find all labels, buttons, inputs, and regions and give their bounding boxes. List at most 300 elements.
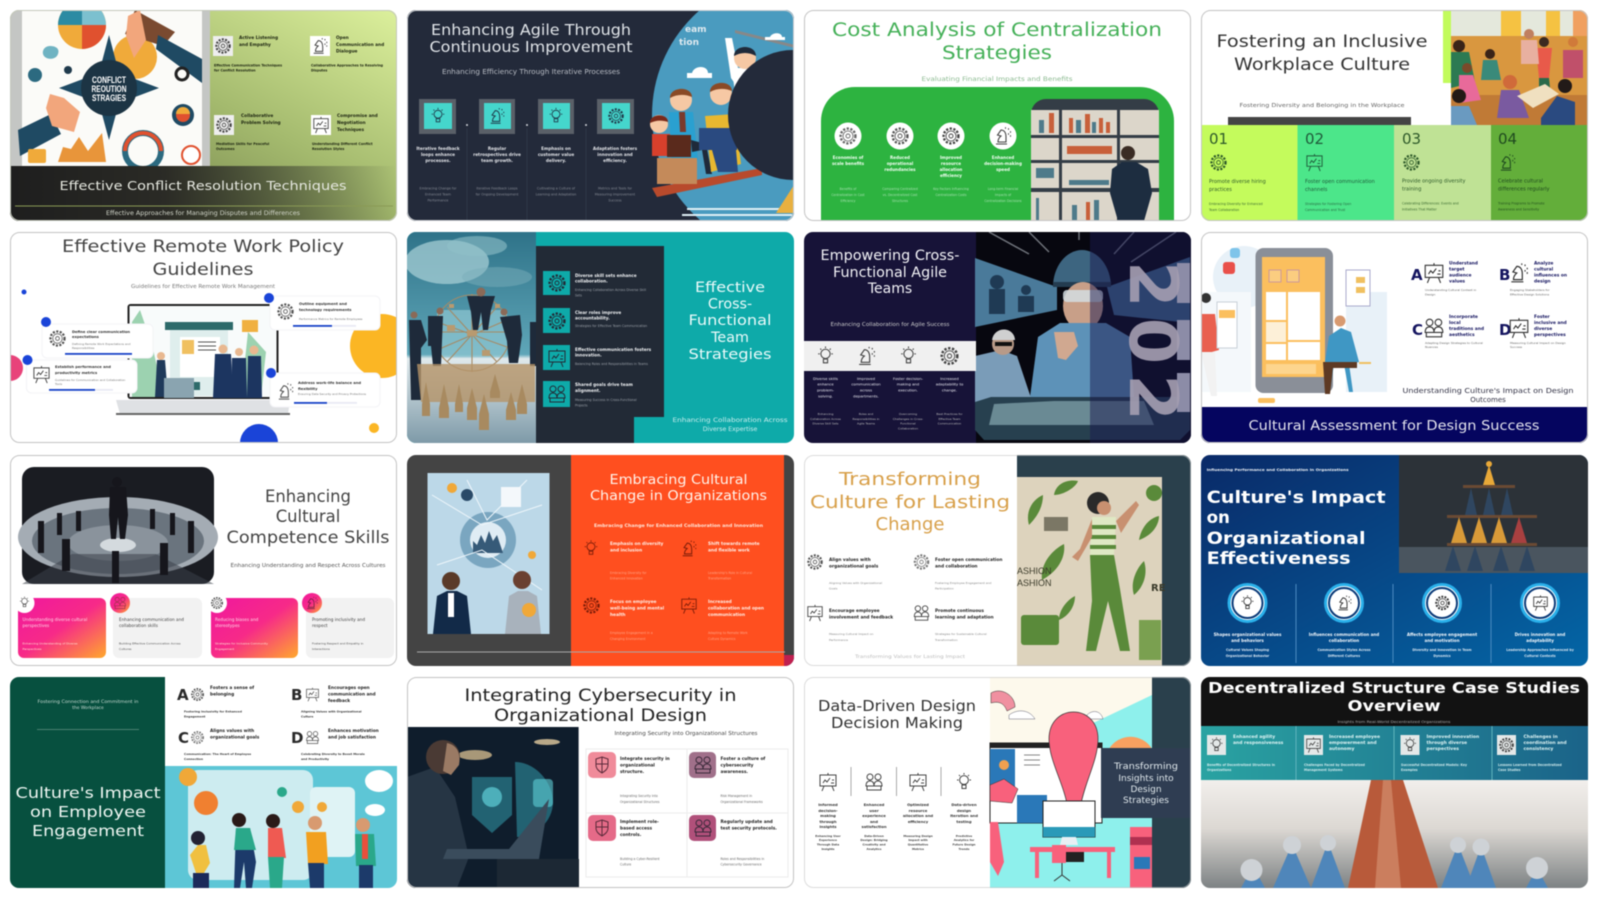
green panel: Centralization in Cost <box>831 193 865 197</box>
policy card: outline equipment: technology requirements <box>299 308 352 312</box>
title: Guidelines <box>152 260 254 280</box>
panel: strategies list: Enhancing Collaboration Across Diverse Skill <box>575 288 646 292</box>
slide: Cost Analysis of Centralization Strategies <box>804 10 1191 221</box>
card 3: Engagement <box>215 647 235 651</box>
items A to D: values <box>1449 278 1465 284</box>
four ring columns: Communication Styles Across <box>1317 648 1371 652</box>
items: Encourage employee <box>829 608 880 614</box>
green panel: Enhanced <box>992 155 1014 160</box>
item descriptions: Increased <box>940 376 959 381</box>
illustration: sustainable fashion: ASHION <box>1017 578 1052 588</box>
subtitle: Integrating Security into Organizational Structures <box>614 731 758 737</box>
column 02: channels <box>1305 187 1328 193</box>
items: Participation <box>935 586 954 590</box>
column 02 <box>1298 125 1394 221</box>
item descriptions: Roles and <box>859 412 873 416</box>
teal column band: Successful Decentralized Models: Key <box>1401 763 1467 767</box>
subtitle: Understanding Culture's Impact on Design <box>1402 387 1574 395</box>
teal column band: perspectives <box>1426 746 1459 752</box>
title: Effectiveness <box>1207 548 1351 568</box>
items grid: Dialogue <box>336 48 357 54</box>
card 2 <box>110 593 202 658</box>
title: Transforming <box>838 469 981 490</box>
illustration: phone app with people <box>1201 246 1387 403</box>
item descriptions: Enhancing <box>818 412 833 416</box>
green panel: Improved <box>940 155 962 160</box>
change items: and flexible work <box>708 548 750 554</box>
title <box>430 21 633 56</box>
photo: futuristic control room: 202 <box>1114 261 1192 431</box>
title: Cultural <box>276 507 340 526</box>
four icon columns: Metrics and Tools for <box>598 186 633 190</box>
green panel: Long-term Financial <box>988 187 1018 191</box>
green panel: Efficiency <box>841 199 856 203</box>
four icon columns: Emphasis on <box>541 146 571 151</box>
change items: Culture Dynamics <box>708 637 736 641</box>
item descriptions: Foster decision- <box>893 376 924 381</box>
security grid: Foster a culture of <box>720 756 765 762</box>
teal column band <box>1201 726 1588 780</box>
four columns: Analytics for <box>954 838 975 842</box>
column 01: Team Collaboration <box>1208 208 1239 212</box>
photo: inclusive classroom illustration <box>1451 10 1588 125</box>
left panel <box>10 677 165 888</box>
items A to D: Understand <box>1449 260 1478 266</box>
subtitle: Guidelines for Effective Remote Work Management <box>131 284 275 290</box>
items A to D: Culture <box>301 714 313 718</box>
security grid: Risk Management in <box>720 794 752 798</box>
change items: Adapting to Remote Work <box>708 631 748 635</box>
item descriptions: communication <box>851 382 881 386</box>
column 03: Provide ongoing diversity <box>1402 178 1466 184</box>
title: on <box>1207 507 1230 527</box>
change items: Enhanced Innovation <box>610 576 643 580</box>
change items: Focus on employee <box>610 599 656 605</box>
four columns: experience <box>862 813 886 818</box>
items A to D: B <box>1499 266 1510 284</box>
four icon columns: Adaptation fosters <box>593 146 638 151</box>
image text: compass label <box>92 75 127 104</box>
items A to D: Adapting Design Strategies to Cultural <box>1425 341 1483 345</box>
teal column band: Examples <box>1401 768 1418 772</box>
slide: Fostering an Inclusive Workplace Culture <box>1201 10 1588 221</box>
items A to D: belonging <box>210 692 234 698</box>
items A to D: Analyze <box>1534 260 1553 266</box>
teal column band: Improved innovation <box>1426 734 1479 740</box>
photo: network and chess pieces <box>405 232 536 443</box>
items A to D: target <box>1449 266 1464 272</box>
teal column band: and responsiveness <box>1233 740 1284 746</box>
four columns: Future Design <box>953 842 975 846</box>
slide: Enhancing Cultural Competence Skills <box>10 455 397 666</box>
items: Align values with <box>829 557 871 563</box>
policy card: define communication: Define clear communication <box>72 330 130 334</box>
title: Change <box>876 514 944 535</box>
items: learning and adaptation <box>935 614 994 620</box>
panel: strategies list <box>536 246 664 443</box>
four ring columns: Leadership Approaches Influenced by <box>1506 648 1575 652</box>
four ring columns: Organizational Behavior <box>1226 654 1270 658</box>
security grid: awareness. <box>720 769 748 775</box>
item descriptions: Challenges in Cross- <box>893 417 923 421</box>
security grid: Integrate security in <box>620 756 670 762</box>
items grid: Effective Communication Techniques <box>214 64 282 68</box>
panel: strategies list: Clear roles improve <box>575 310 621 315</box>
item descriptions: Functional <box>900 422 916 426</box>
items grid: and Empathy <box>239 42 271 48</box>
four ring columns: Shapes organizational values <box>1214 632 1282 637</box>
four columns: Measuring Design <box>903 834 933 838</box>
item descriptions: Best Practices for <box>936 412 963 416</box>
column 02: Communication and Trust <box>1305 208 1346 212</box>
card 3: Strategies for Inclusive Community <box>215 642 268 646</box>
photo: futuristic control room <box>975 232 1192 443</box>
title: Continuous Improvement <box>430 38 633 56</box>
column 03 <box>1394 125 1491 221</box>
items A to D: Enhances motivation <box>328 728 379 734</box>
four columns: Enhancing User <box>815 834 841 838</box>
bottom banner with title <box>1201 407 1588 443</box>
change items: well-being and mental <box>610 606 665 612</box>
subtitle: Enhancing Collaboration for Agile Success <box>830 322 950 328</box>
footer subtitle: Transforming Values for Lasting Impact <box>854 654 965 660</box>
items: Fostering Employee Engagement and <box>935 581 992 585</box>
card 4: respect <box>312 623 328 628</box>
four columns: Impact with <box>908 838 928 842</box>
item descriptions: enhance <box>817 382 834 386</box>
four ring columns: Different Cultures <box>1328 654 1360 658</box>
photo: pawn pyramid <box>1399 455 1588 573</box>
items: Measuring Cultural Impact on <box>829 632 873 636</box>
slide: Empowering Cross-Functional Agile Teams <box>804 232 1192 443</box>
items A to D: Aligns values with <box>210 728 254 734</box>
panel: strategies list: Sets <box>575 294 582 298</box>
panel: strategies list: Strategies for Effective Team Communication <box>575 324 647 328</box>
title: Fostering an Inclusive <box>1216 32 1428 51</box>
item descriptions: Diverse Skill Sets <box>813 422 839 426</box>
title <box>1208 679 1580 715</box>
items A to D: Design <box>1425 292 1435 296</box>
items: Foster open communication <box>935 557 1002 563</box>
green panel: vs. Decentralized Cost <box>883 193 918 197</box>
title <box>688 280 772 363</box>
image text: compass label: REOUTION <box>92 84 127 95</box>
four columns: Quantitative <box>908 842 928 846</box>
four columns: Analytics <box>867 847 882 851</box>
change items: Increased <box>708 599 732 605</box>
title: on Employee <box>30 803 146 821</box>
title <box>63 238 344 276</box>
four icon columns: efficiency. <box>603 158 627 163</box>
security grid <box>586 749 788 877</box>
items: Goals <box>829 586 838 590</box>
items grid: Understanding Different Conflict <box>312 142 373 146</box>
item descriptions: Overcoming <box>899 412 917 416</box>
slide: Integrating Cybersecurity in Organizational Design <box>407 677 794 888</box>
item descriptions <box>810 376 964 430</box>
slide: Enhancing Agile Through Continuous Improvement <box>406 10 795 222</box>
policy card: establish metrics: Establish performance and <box>55 365 111 369</box>
items A to D: feedback <box>328 698 350 704</box>
four icon columns: Learning and Adaptation <box>536 192 576 196</box>
four icon columns: for Ongoing Development <box>476 192 519 196</box>
subtitle: Enhancing Efficiency Through Iterative Processes <box>442 68 621 76</box>
items A to D: A <box>177 686 189 704</box>
card 4 <box>302 593 394 658</box>
items: Promote continuous <box>935 608 984 614</box>
item descriptions: making and <box>897 382 920 386</box>
items A to D: Communication: The Heart of Employee <box>184 752 251 756</box>
four ring columns: Diversity and Innovation in Team <box>1412 648 1472 652</box>
change items: Leadership's Role in Cultural <box>708 571 752 575</box>
items A to D: influences on <box>1534 272 1567 278</box>
illustration: sustainable fashion <box>1017 477 1166 666</box>
panel: strategies list: Projects <box>575 404 588 408</box>
green panel: Benefits of <box>840 187 857 191</box>
subtitle: Outcomes <box>1470 396 1506 404</box>
four icon columns <box>416 98 638 202</box>
items grid: Open <box>336 35 349 41</box>
teal column band: Enhanced agility <box>1233 734 1275 740</box>
item descriptions: change. <box>942 388 957 392</box>
illustration: team on a boat <box>649 10 794 221</box>
column 01 <box>1201 125 1298 221</box>
items A to D: Connection <box>184 757 203 761</box>
card 3: stereotypes <box>215 623 240 628</box>
column 03: Celebrating Differences: Events and <box>1402 202 1459 206</box>
title: Competence Skills <box>226 528 390 547</box>
title: Decision Making <box>831 714 963 732</box>
item descriptions: Communication <box>938 422 961 426</box>
column 01: Promote diverse hiring <box>1209 179 1266 185</box>
policy card: outline equipment: Outline equipment and <box>299 302 347 306</box>
title: Culture's Impact <box>16 784 160 802</box>
items: Transformation <box>934 638 958 642</box>
change items <box>584 540 764 641</box>
four icon columns: Iterative feedback <box>416 146 460 151</box>
eyebrow: Influencing Performance and Collaboration in Organizations <box>1207 468 1349 472</box>
items A to D: diverse <box>1534 326 1552 332</box>
items A to D: Success <box>1510 345 1523 349</box>
four icon columns: Measuring Improvement <box>595 192 636 196</box>
items A to D: Foster <box>1534 314 1551 320</box>
items grid: Resolution Styles <box>312 147 344 151</box>
four columns: Through Data <box>817 842 839 846</box>
green panel: Centralization Costs <box>935 193 967 197</box>
title: Organizational Design <box>494 705 707 725</box>
security grid: Roles and Responsibilities in <box>720 857 764 861</box>
items: involvement and feedback <box>829 614 893 620</box>
card 1 <box>14 593 106 658</box>
item descriptions: adaptability to <box>936 382 964 386</box>
card 2: collaboration skills <box>119 623 158 628</box>
green panel: Centralization Decisions <box>984 199 1022 203</box>
card 1: Perspectives <box>22 647 42 651</box>
items A to D: Encourages open <box>328 685 370 691</box>
title: Culture for Lasting <box>810 492 1010 513</box>
column 04: Celebrate cultural <box>1498 178 1543 184</box>
photo: analyst looking at chart wall <box>1031 99 1159 221</box>
policy card: work-life balance: Address work-life balance and <box>298 381 361 385</box>
four icon columns: Success <box>608 198 622 202</box>
four columns: through <box>819 819 837 824</box>
subtitle: Enhancing Collaboration Across <box>672 417 788 424</box>
four columns: Insights <box>821 847 835 851</box>
column 01: 01 <box>1209 130 1228 148</box>
green panel: operational <box>887 161 914 166</box>
title: Empowering Cross- <box>820 248 960 264</box>
photo: analyst with laptop and holograms <box>407 727 579 888</box>
card 1: Enhancing Understanding of Diverse <box>22 642 78 646</box>
items A to D: audience <box>1449 272 1471 278</box>
photo: leader on disc <box>18 467 218 584</box>
items A to D: Effective Design Solutions <box>1510 292 1550 296</box>
callout box: Design <box>1130 785 1162 795</box>
subtitle: Diverse Expertise <box>703 426 757 433</box>
items grid: Mediation Skills for Peaceful <box>216 142 269 146</box>
four icon columns: customer value <box>538 152 574 157</box>
four columns: Informed <box>818 802 838 807</box>
four columns: Design: Bridging <box>860 838 888 842</box>
slide: Effective Conflict Resolution Techniques <box>10 1 397 221</box>
title: Engagement <box>32 822 144 840</box>
teal column band: Organizations <box>1207 768 1231 772</box>
header band <box>1201 677 1588 726</box>
items A to D <box>177 685 379 761</box>
items: and collaboration <box>935 564 977 570</box>
four ring columns: Drives innovation and <box>1515 632 1565 637</box>
title <box>464 685 736 725</box>
slide: Embracing Cultural Change in Organizations <box>407 455 794 666</box>
four columns: making <box>820 813 836 818</box>
four ring columns: collaboration <box>1329 638 1359 643</box>
policy card: define communication: Defining Remote Work Expectations and <box>72 342 131 346</box>
policy card: establish metrics: Guidelines for Communication and Collaboration <box>55 378 126 382</box>
items A to D <box>1411 260 1567 349</box>
title: Organizational <box>1207 528 1366 548</box>
policy card: define communication: Responsibilities <box>72 346 95 350</box>
title: Culture's Impact <box>1207 487 1386 507</box>
title <box>820 248 960 297</box>
callout box: Transforming <box>1113 762 1178 772</box>
items A to D: local <box>1449 320 1461 326</box>
column 04 <box>1491 125 1588 221</box>
four icon columns: Performance <box>428 198 448 202</box>
teal column band: Lessons Learned from Decentralized <box>1498 763 1562 767</box>
change items: Embracing Diversity for <box>610 571 647 575</box>
items A to D: D <box>1499 321 1511 339</box>
items grid: Outcomes <box>216 147 235 151</box>
four icon columns: processes. <box>425 158 451 163</box>
card 4: Promoting inclusivity and <box>312 617 365 622</box>
four columns: resource <box>909 808 928 813</box>
items <box>808 555 1002 642</box>
title <box>590 473 767 504</box>
items A to D: organizational goals <box>210 734 260 740</box>
items: Aligning Values with Organizational <box>829 581 882 585</box>
security grid: organizational <box>620 762 655 768</box>
illustration: designer desk <box>990 677 1191 888</box>
four columns: allocation and <box>903 813 933 818</box>
column 02: 02 <box>1305 130 1324 148</box>
change items: Emphasis on diversity <box>610 541 664 547</box>
item descriptions: Effective Team <box>939 417 961 421</box>
card 1: perspectives <box>22 623 49 628</box>
slide: Culture's Impact on Organizational Effectiveness <box>1201 455 1588 666</box>
four icon columns: Iterative Feedback Loops <box>476 186 518 190</box>
policy card: work-life balance <box>266 368 380 407</box>
items A to D: design <box>1534 278 1551 284</box>
security grid: Culture <box>620 862 631 866</box>
subtitle: Insights from Real-World Decentralized Organizations <box>1338 720 1451 724</box>
item descriptions: departments. <box>853 394 879 398</box>
title: Integrating Cybersecurity in <box>464 685 736 705</box>
policy card: define communication: expectations <box>72 335 100 339</box>
security grid: Implement role- <box>620 819 659 825</box>
title: Overview <box>1348 697 1440 715</box>
four ring columns <box>1214 584 1575 663</box>
teal column band: coordination and <box>1524 740 1567 746</box>
four columns: Predictive <box>956 834 972 838</box>
items A to D: inclusive and <box>1534 320 1567 326</box>
items A to D: Engagement <box>184 714 206 718</box>
four columns <box>815 767 978 851</box>
policy card: establish metrics <box>22 355 137 393</box>
column 04: Training Programs to Promote <box>1497 202 1545 206</box>
panel: strategies list: Diverse skill sets enhance <box>575 273 637 278</box>
items grid: Collaborative Approaches to Resolving <box>311 64 384 68</box>
items A to D: D <box>291 729 303 747</box>
slide: Transforming Culture for Lasting Change <box>804 455 1191 666</box>
title <box>1207 487 1386 568</box>
four icon columns: team growth. <box>481 158 513 163</box>
teal column band: Challenges in <box>1524 734 1558 740</box>
title: Cross- <box>708 296 752 312</box>
items A to D: cultural <box>1534 266 1554 272</box>
items A to D: B <box>291 686 302 704</box>
four columns: iteration and <box>950 813 978 818</box>
title <box>810 469 1010 535</box>
title: Decentralized Structure Case Studies <box>1208 679 1580 697</box>
items grid: Techniques <box>337 127 364 133</box>
teal column band: consistency <box>1524 746 1553 752</box>
card 4: Interactions <box>312 647 330 651</box>
title: Enhancing Agile Through <box>431 21 631 39</box>
change items: Changing Environment <box>610 637 646 641</box>
subtitle: Enhancing Understanding and Respect Across Cultures <box>230 563 386 569</box>
title: Strategies <box>942 43 1052 64</box>
slide: Effective Cross-Functional Team Strategies <box>405 232 794 443</box>
change items: communication <box>708 612 745 618</box>
card 3: Reducing biases and <box>215 617 259 622</box>
panel: strategies list: Effective communication fosters <box>575 347 652 352</box>
item descriptions: Diverse skills <box>813 376 838 381</box>
green panel: Comparing Centralized <box>882 187 918 191</box>
four columns: Experience <box>819 838 837 842</box>
title <box>832 20 1162 64</box>
items A to D: aesthetics <box>1449 332 1475 338</box>
four columns: Metrics <box>912 847 924 851</box>
policy card: define communication <box>41 317 153 358</box>
green panel: Economies of <box>833 155 864 160</box>
green panel: Reduced <box>890 155 910 160</box>
items grid: Active Listening <box>239 35 278 41</box>
four icon columns: Cultivating a Culture of <box>537 186 576 190</box>
teal column band: Management Systems <box>1304 768 1343 772</box>
green panel: redundancies <box>884 167 916 172</box>
change items: and inclusion <box>610 548 642 554</box>
four icon columns: Embracing Change for <box>420 186 457 190</box>
